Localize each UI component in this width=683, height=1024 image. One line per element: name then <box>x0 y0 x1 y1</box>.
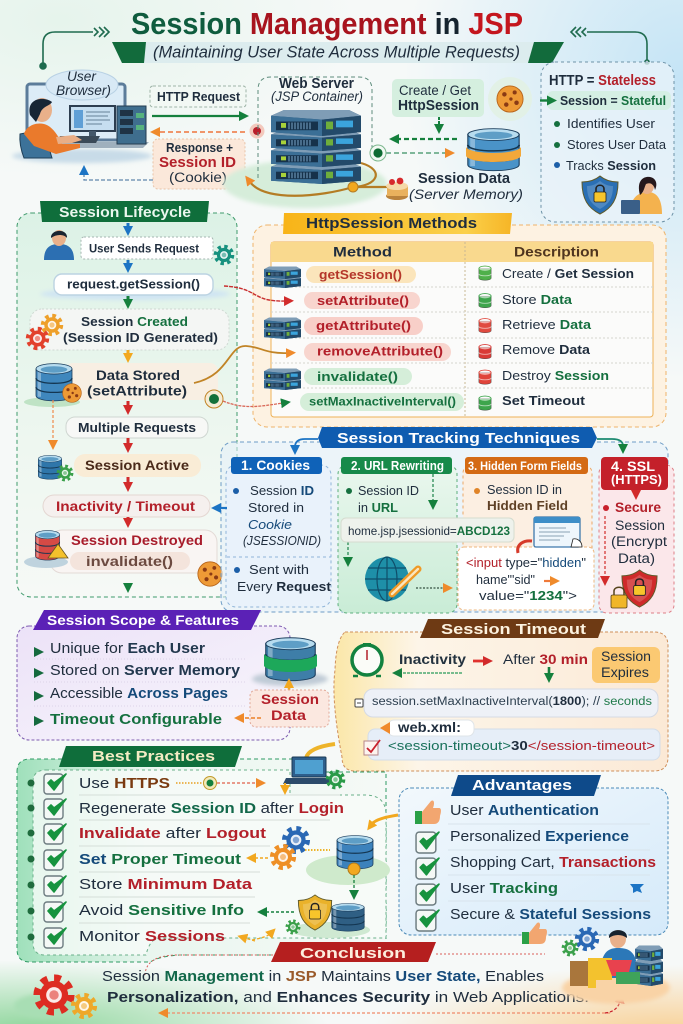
icon: cookie <box>198 562 222 586</box>
advantages list: Shopping Cart, Transactions <box>450 855 656 871</box>
column: URL rewriting <box>338 457 457 613</box>
puzzle pieces <box>570 958 640 988</box>
arrow: server to data <box>370 145 447 161</box>
feature list: Stored on Server Memory <box>50 663 240 679</box>
column: hidden form fields: Session ID in <box>487 482 562 497</box>
HTTP request label <box>150 86 246 107</box>
row: getSession: Create / Get Session <box>502 266 634 281</box>
checklist: Use HTTPS <box>79 776 170 792</box>
step: session destroyed: Session Destroyed <box>71 533 203 548</box>
connector: data stored to removeAttribute <box>194 346 288 383</box>
panel: stateless vs stateful: Session = Stateful <box>560 93 666 108</box>
connector: HTTPS to monitor <box>176 776 258 790</box>
column: cookies: Stored in <box>248 500 304 515</box>
heading: session tracking techniques: Session Tracking Techniques <box>337 430 580 447</box>
step: session destroyed <box>50 530 217 573</box>
panel: best practices <box>17 744 390 962</box>
icon: woman with laptop <box>621 177 662 214</box>
column: cookies: (JSESSIONID) <box>243 534 321 548</box>
step: multiple requests <box>66 417 208 438</box>
step: inactivity timeout <box>43 495 210 517</box>
column: URL rewriting: in URL <box>358 500 398 515</box>
column: SSL HTTPS: (HTTPS) <box>611 473 662 487</box>
panel: session timeout <box>334 619 668 771</box>
arrow: cookies to lifecycle <box>219 507 227 509</box>
icon: red shield <box>622 570 657 607</box>
curved links: server to cookie and cake <box>250 163 390 196</box>
row: setMaxInactiveInterval: setMaxInactiveInterval() <box>309 394 456 408</box>
step: session destroyed: invalidate() <box>86 554 173 569</box>
panel: session tracking techniques <box>219 427 674 613</box>
step: session active: Session Active <box>85 458 190 473</box>
panel: advantages <box>399 775 668 935</box>
icon: database with green band <box>252 638 328 686</box>
icon: database with gear <box>38 455 72 480</box>
heading: conclusion: Conclusion <box>300 945 406 962</box>
column: SSL HTTPS <box>599 457 674 613</box>
column: cookies: 1. Cookies <box>241 458 310 473</box>
client: user at browser: Browser) <box>56 83 111 98</box>
subtitle ribbon: (Maintaining User State Across Multiple Requests) <box>153 44 520 62</box>
create HttpSession: Create / Get <box>399 83 471 98</box>
client: user at browser <box>12 69 152 163</box>
panel: stateless vs stateful: HTTP = Stateless <box>549 73 656 89</box>
arrow: globe to hidden input <box>416 587 445 589</box>
advantages list <box>416 803 656 931</box>
row: removeAttribute <box>304 342 591 361</box>
column: SSL HTTPS: Data) <box>618 551 655 566</box>
arrow <box>126 438 130 445</box>
response box <box>153 139 245 189</box>
step: session created <box>30 309 229 350</box>
column: hidden form fields: 3. Hidden Form Fields <box>468 461 582 473</box>
checklist: Set Proper Timeout <box>79 852 241 868</box>
step: multiple requests: Multiple Requests <box>78 421 196 435</box>
row: invalidate <box>264 368 609 390</box>
heading: session timeout: Session Timeout <box>441 622 586 638</box>
session expires badge: Session <box>601 649 651 664</box>
step: inactivity timeout: Inactivity / Timeout <box>56 499 196 514</box>
web server: (JSP Container) <box>271 89 363 104</box>
icon: session cake <box>386 178 408 200</box>
column: cookies: Cookie <box>248 517 292 532</box>
input code: value=" 1234 "> <box>479 588 577 603</box>
panel: session lifecycle <box>17 201 237 597</box>
arrow: computer down <box>284 783 286 787</box>
subtitle ribbon <box>112 42 564 63</box>
row: setAttribute: Store Data <box>502 292 573 307</box>
panel: conclusion <box>14 942 620 1018</box>
icon: security shield <box>582 176 618 214</box>
database: session data <box>466 129 521 171</box>
checklist: Regenerate Session ID after Login <box>79 801 344 817</box>
URL example <box>341 518 514 542</box>
arrow <box>126 517 130 520</box>
arrow: orange dashed <box>52 400 54 442</box>
icon: globe with chain <box>365 557 418 601</box>
checklist: Monitor Sessions <box>79 929 225 945</box>
icon: red and orange gears <box>14 978 95 1018</box>
icon: thumbs up <box>415 800 441 824</box>
step: data stored: (setAttribute) <box>87 384 187 398</box>
methods table: Method <box>333 244 392 260</box>
icon: web form with hand <box>518 517 582 553</box>
heading: HttpSession methods <box>283 213 512 234</box>
code: web.xml: web.xml: <box>397 720 461 735</box>
illustration: developer with puzzle and servers <box>562 929 670 1004</box>
timeout flow: Inactivity <box>399 651 466 667</box>
icon: gears <box>28 316 61 348</box>
icon: padlock <box>611 587 627 608</box>
row: getAttribute: Retrieve Data <box>502 317 592 332</box>
arrow <box>126 583 130 585</box>
input code <box>458 547 594 610</box>
column: cookies: Sent with <box>249 562 309 577</box>
step: user sends request <box>81 237 213 259</box>
code: web.xml: <session-timeout> 30</session-timeout> <box>388 738 655 753</box>
column: hidden form fields <box>463 457 592 565</box>
step: session created: (Session ID Generated) <box>63 330 218 345</box>
row: getSession: getSession() <box>319 268 402 282</box>
column: SSL HTTPS: Session <box>615 518 665 533</box>
column: SSL HTTPS: (Encrypt <box>611 534 667 549</box>
response box: Session ID <box>159 155 236 171</box>
conclusion text: Personalization, and Enhances Security in Web Applications. <box>107 990 589 1006</box>
decorative connector: title left <box>40 27 109 69</box>
arrow <box>126 401 130 407</box>
step: session active <box>74 454 201 477</box>
feature list: Accessible Across Pages <box>50 686 228 702</box>
arrow <box>126 260 130 265</box>
timeout flow <box>399 651 588 675</box>
column: SSL HTTPS: Secure <box>615 500 661 515</box>
web server: Web Server <box>279 76 354 92</box>
row: getAttribute: getAttribute() <box>316 319 411 333</box>
heading: session lifecycle <box>40 201 209 222</box>
web server <box>223 76 387 208</box>
icon: computer with gear <box>283 744 343 787</box>
feature list <box>34 641 245 728</box>
create HttpSession: HttpSession <box>398 98 479 114</box>
step: session created: Session Created <box>81 314 188 329</box>
column: cookies: Every Request <box>237 579 332 594</box>
code: setMaxInactiveInterval: session.setMaxInactiveInterval( 1800 ); // seconds <box>372 696 652 708</box>
code: web.xml <box>364 720 660 760</box>
arrow <box>126 223 130 228</box>
icon: user <box>44 230 74 260</box>
session data label: Session Data <box>418 171 511 187</box>
checklist: Invalidate after Logout <box>79 826 266 842</box>
panel: stateless vs stateful: Tracks Session <box>566 158 656 173</box>
response box: Response + <box>166 141 233 155</box>
arrow: session data up <box>288 686 290 690</box>
heading: best practices <box>59 746 242 767</box>
input code: hame"'sid" <box>476 572 535 587</box>
arrow: response to browser <box>158 124 264 138</box>
connectors from heading <box>295 439 623 447</box>
column: cookies <box>226 457 332 607</box>
panel: stateless vs stateful <box>540 62 674 222</box>
step: request.getSession <box>40 274 230 300</box>
URL example: home.jsp.jsessionid=ABCD123 <box>348 524 510 538</box>
arrow: database to secure store <box>353 875 355 892</box>
icon: shield with database <box>287 895 370 938</box>
arrow <box>126 296 130 301</box>
heading: session scope: Session Scope & Features <box>47 613 239 628</box>
feature list: Unique for Each User <box>50 641 205 657</box>
arrow <box>126 350 130 355</box>
row: getAttribute <box>264 317 592 339</box>
arrow: request to server <box>152 115 241 117</box>
timeout flow: After 30 min <box>503 651 588 667</box>
icon: bottom thumbs up <box>522 922 547 944</box>
row: setMaxInactiveInterval <box>300 393 586 411</box>
column: hidden form fields: Hidden Field <box>487 498 568 513</box>
session data box: Data <box>271 707 306 723</box>
inner panel <box>33 770 386 955</box>
conclusion text: Session Management in JSP Maintains User State, Enables <box>102 969 544 985</box>
row: removeAttribute: Remove Data <box>502 342 591 357</box>
HTTP request label: HTTP Request <box>157 89 241 104</box>
icon: teal gear <box>216 247 232 263</box>
session data box <box>250 690 329 727</box>
row: setMaxInactiveInterval: Set Timeout <box>502 393 586 408</box>
column: SSL HTTPS: 4. SSL <box>611 459 655 474</box>
icon: database with cookie <box>36 364 81 402</box>
icon: gears and database <box>272 829 390 885</box>
heading: best practices: Best Practices <box>92 749 215 765</box>
column: URL rewriting: Session ID <box>358 483 419 498</box>
arrow: bottom dashed loop <box>166 1001 620 1013</box>
session expires badge: Expires <box>601 665 649 680</box>
client: user at browser: User <box>67 69 97 84</box>
decorative connector: title right <box>571 27 649 64</box>
methods table: Description <box>514 244 599 260</box>
arrow: curved to monitor sessions <box>245 934 270 941</box>
response box: (Cookie) <box>169 170 227 185</box>
heading: session lifecycle: Session Lifecycle <box>59 205 191 221</box>
column: cookies: Session ID <box>250 483 314 498</box>
connector: getSession to setAttribute <box>224 286 286 301</box>
heading: advantages: Advantages <box>472 778 572 794</box>
session data label: (Server Memory) <box>409 186 523 202</box>
row: removeAttribute: removeAttribute() <box>317 344 443 358</box>
create HttpSession <box>392 77 532 121</box>
icon: blue marker <box>630 884 644 893</box>
input code: <input type="hidden" <box>466 556 586 570</box>
row: invalidate: invalidate() <box>317 370 398 384</box>
panel: session scope and features <box>17 610 290 740</box>
row: setAttribute <box>304 292 573 309</box>
heading: session scope <box>33 610 261 630</box>
step: request.getSession: request.getSession() <box>67 278 200 292</box>
arrow: to avoid sensitive info <box>265 911 294 913</box>
heading: session tracking techniques <box>318 427 597 448</box>
session data box: Session <box>261 691 319 707</box>
arrow <box>126 477 130 484</box>
arrow: to set proper timeout <box>254 857 268 859</box>
checklist: Store Minimum Data <box>79 877 253 893</box>
arrow: session data to timeout configurable <box>242 717 261 719</box>
methods table <box>264 242 653 417</box>
row: getSession <box>264 266 634 288</box>
session expires badge <box>592 647 660 683</box>
arrow: data to server <box>397 138 457 140</box>
title: Session Management in JSP <box>131 6 523 41</box>
heading: conclusion <box>271 942 436 962</box>
advantages list: Personalized Experience <box>450 829 629 845</box>
heading: session timeout <box>420 619 605 638</box>
advantages list: User Tracking <box>450 881 558 897</box>
checklist <box>28 774 344 948</box>
server rack <box>271 110 361 184</box>
arrow: cookie back to browser <box>84 173 153 180</box>
icon: stopwatch <box>352 643 382 676</box>
feature list: Timeout Configurable <box>50 712 222 728</box>
icon: red database with warning <box>24 531 68 568</box>
step: data stored: Data Stored <box>96 368 180 383</box>
panel: stateless vs stateful: Identifies User <box>567 116 656 131</box>
advantages list: User Authentication <box>450 803 599 819</box>
advantages list: Secure & Stateful Sessions <box>450 907 651 923</box>
arrow: stateless to stateful <box>540 99 549 102</box>
checklist: Avoid Sensitive Info <box>79 903 244 919</box>
code: setMaxInactiveInterval <box>355 689 658 717</box>
connector: data stored to setMaxInactiveInterval <box>205 390 283 408</box>
step: data stored <box>24 363 218 407</box>
arrow: advantages to best practices <box>372 815 398 824</box>
heading: HttpSession methods: HttpSession Methods <box>306 216 477 232</box>
step: user sends request: User Sends Request <box>89 242 199 256</box>
session data label <box>409 171 523 202</box>
column: URL rewriting: 2. URL Rewriting <box>351 459 444 473</box>
conclusion text <box>102 969 589 1006</box>
row: setAttribute: setAttribute() <box>317 294 409 308</box>
heading: advantages <box>451 775 601 796</box>
arrow: create to data <box>438 117 440 126</box>
row: invalidate: Destroy Session <box>502 368 609 383</box>
panel: HttpSession methods <box>253 213 666 427</box>
panel: stateless vs stateful: Stores User Data <box>567 137 667 152</box>
